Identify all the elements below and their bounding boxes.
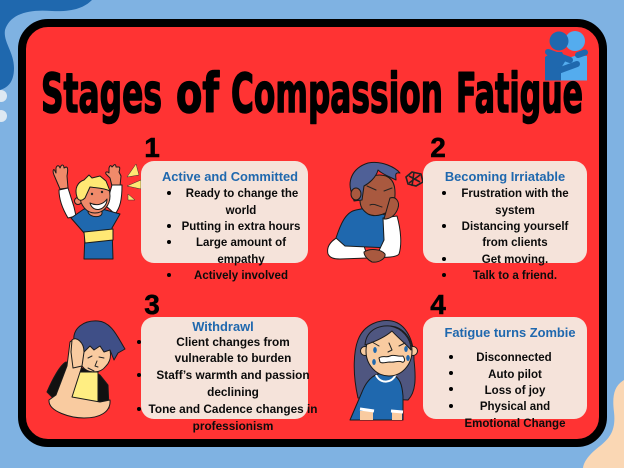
icon: yellow sparks: [127, 164, 141, 200]
card: [423, 161, 587, 263]
bullet list: [442, 188, 569, 282]
bullet list: Loss of joy: [485, 385, 546, 397]
icon: scribble: [406, 172, 423, 186]
bullet list: declining: [207, 385, 259, 399]
icon: hugging people: [545, 31, 587, 80]
bullet list: Large amount of: [196, 237, 286, 249]
bullet list: Auto pilot: [488, 369, 542, 381]
bullet list: professionism: [193, 419, 273, 433]
title: [41, 62, 583, 125]
illustration: excited blond boy: [53, 165, 122, 259]
background blob: top left: [0, 0, 92, 90]
bullet list: Talk to a friend.: [473, 270, 557, 282]
stage 3: [47, 289, 317, 433]
illustration: distressed person: [47, 321, 125, 418]
stage 2: [328, 132, 587, 282]
bullet list: vulnerable to burden: [175, 351, 291, 365]
bullet list: empathy: [217, 254, 265, 266]
bullet list: Client changes from: [176, 335, 290, 349]
stage 4: [350, 289, 587, 430]
bullet list: Get moving.: [482, 254, 548, 266]
bullet list: Ready to change the: [186, 188, 298, 200]
illustration: crying woman: [350, 321, 418, 420]
tears: [372, 346, 410, 365]
bullet list: [167, 188, 300, 282]
heading: Fatigue turns Zombie: [444, 325, 576, 340]
number 2: 2: [430, 132, 446, 163]
stage 1: [53, 132, 308, 282]
bullet list: Physical and: [480, 401, 550, 413]
illustration: frustrated person: [328, 162, 401, 262]
card: [141, 317, 308, 419]
title: Stages: [41, 62, 162, 125]
bullet list: system: [495, 205, 535, 217]
heading: Becoming Irriatable: [445, 169, 565, 184]
bullet list: world: [225, 205, 256, 217]
background blob: bottom right: [583, 380, 624, 468]
number 4: 4: [430, 289, 446, 320]
bullet list: Staff’s warmth and passion: [156, 368, 310, 382]
title: of: [176, 62, 219, 125]
bullet list: from clients: [482, 237, 548, 249]
bullet list: [449, 352, 565, 430]
heading: Active and Committed: [162, 169, 298, 184]
bullet list: Putting in extra hours: [182, 221, 300, 233]
bullet list: Disconnected: [476, 352, 552, 364]
number 3: 3: [144, 289, 160, 320]
bullet list: Tone and Cadence changes in: [149, 402, 317, 416]
bullet list: [137, 335, 317, 433]
title: Compassion: [231, 62, 443, 125]
bullet list: Frustration with the: [461, 188, 569, 200]
background dots: [0, 90, 7, 122]
bullet list: Emotional Change: [465, 418, 565, 430]
card: [141, 161, 308, 263]
card: [423, 317, 587, 419]
bullet list: Distancing yourself: [462, 221, 569, 233]
bullet list: Actively involved: [194, 270, 288, 282]
number 1: 1: [144, 132, 160, 163]
heading: Withdrawl: [192, 319, 254, 334]
